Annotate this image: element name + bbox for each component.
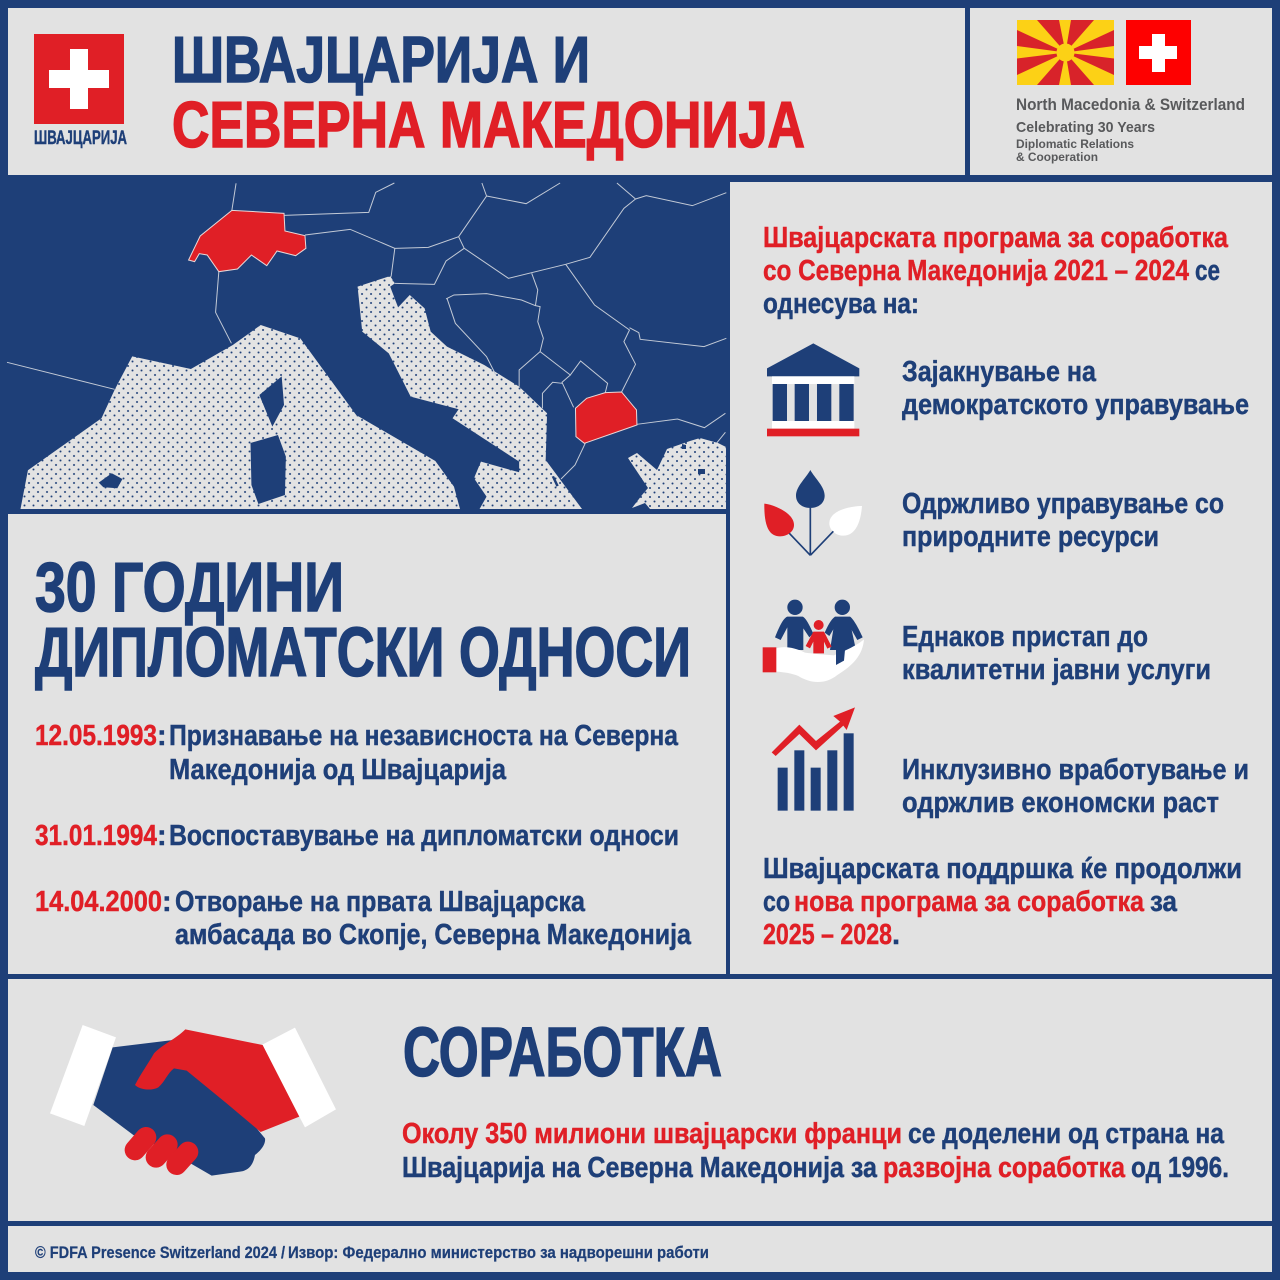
- panel: footer: [8, 1226, 1272, 1272]
- funding text: развојна соработка: [883, 1152, 1126, 1184]
- timeline: 1994: 31.01.1994: [35, 820, 157, 852]
- text: equal access: квалитетни јавни услуги: [902, 654, 1211, 686]
- icon: institution building: [767, 343, 859, 436]
- closing statement: за: [1150, 886, 1178, 918]
- logo text: & Cooperation: [1016, 150, 1098, 164]
- map: [7, 183, 726, 509]
- funding text: [402, 1118, 1229, 1184]
- programme intro: се: [1195, 255, 1220, 287]
- sea: western Mediterranean: [20, 325, 460, 509]
- programme intro: [763, 222, 1229, 320]
- funding text: од 1996.: [1131, 1152, 1229, 1184]
- logo text: North Macedonia & Switzerland: [1016, 95, 1245, 114]
- text: natural resources: Одржливо управување со: [902, 488, 1224, 520]
- text: employment and growth: одржлив економски раст: [902, 787, 1219, 819]
- panel: header title: [8, 8, 965, 175]
- heading: [35, 548, 691, 691]
- title: СЕВЕРНА МАКЕДОНИЈА: [172, 88, 805, 161]
- timeline: 2000: [35, 886, 692, 951]
- logo text: Diplomatic Relations: [1016, 137, 1134, 151]
- icon: North Macedonia flag: [1017, 20, 1114, 85]
- panel: 30 years of diplomatic relations: [8, 514, 726, 974]
- closing statement: 2025 – 2028: [763, 919, 892, 951]
- timeline: 2000: Отворање на првата Швајцарска: [175, 886, 586, 918]
- funding text: Швајцарија на Северна Македонија за: [402, 1152, 878, 1184]
- panel: cooperation programme: [730, 182, 1272, 974]
- timeline: 2000: :: [162, 886, 172, 918]
- Switzerland: [189, 210, 306, 272]
- text: equal access: Еднаков пристап до: [902, 621, 1148, 653]
- funding text: Околу 350 милиони швајцарски франци: [402, 1118, 902, 1150]
- heading: ДИПЛОМАТСКИ ОДНОСИ: [35, 613, 691, 691]
- source line: © FDFA Presence Switzerland 2024 /: [35, 1243, 285, 1262]
- closing statement: [763, 853, 1242, 951]
- programme intro: однесува на:: [763, 288, 919, 320]
- timeline: 1993: Македонија од Швајцарија: [169, 754, 507, 786]
- timeline: 2000: амбасада во Скопје, Северна Македонија: [175, 919, 692, 951]
- icon: Swiss logo: [34, 34, 127, 149]
- text: natural resources: природните ресурси: [902, 521, 1159, 553]
- text: natural resources: [902, 488, 1224, 553]
- sea: Aegean: [628, 438, 726, 509]
- panel: cooperation: [8, 979, 1272, 1221]
- North Macedonia: [575, 392, 637, 443]
- closing statement: нова програма за соработка: [794, 886, 1145, 918]
- text: democratic governance: Зајакнување на: [902, 356, 1097, 388]
- timeline: 1994: :: [157, 820, 167, 852]
- logo text: Celebrating 30 Years: [1016, 119, 1155, 136]
- icon: Swiss logo: ШВАЈЦАРИЈА: [34, 128, 127, 149]
- text: democratic governance: [902, 356, 1249, 421]
- icon: handshake: [50, 1025, 336, 1176]
- closing statement: .: [892, 919, 900, 951]
- source line: Извор: Федерално министерство за надворешни работи: [288, 1243, 709, 1262]
- timeline: 1993: Признавање на независноста на Северна: [169, 720, 679, 752]
- logo text: [1016, 95, 1245, 164]
- timeline: 2000: 14.04.2000: [35, 886, 162, 918]
- heading: 30 ГОДИНИ: [35, 548, 344, 626]
- closing statement: со: [763, 886, 790, 918]
- icon: natural resources: [764, 470, 862, 555]
- timeline: 1993: 12.05.1993: [35, 720, 157, 752]
- heading: СОРАБОТКА: [403, 1013, 722, 1091]
- timeline: 1993: :: [157, 720, 167, 752]
- icon: family in hand: [763, 600, 864, 682]
- funding text: се доделени од страна на: [908, 1118, 1225, 1150]
- icon: Swiss flag: [1126, 20, 1191, 85]
- timeline: 1994: [35, 820, 679, 852]
- title: ШВАЈЦАРИЈА И: [172, 23, 590, 96]
- programme intro: со Северна Македонија 2021 – 2024: [763, 255, 1189, 287]
- icon: growth chart: [772, 707, 855, 811]
- text: employment and growth: [902, 754, 1249, 819]
- country borders: [7, 183, 726, 479]
- source line: [35, 1243, 709, 1262]
- sea: Adriatic: [358, 276, 582, 509]
- timeline: 1993: [35, 720, 679, 786]
- title: [172, 23, 805, 161]
- timeline: 1994: Воспоставување на дипломатски односи: [169, 820, 679, 852]
- text: equal access: [902, 621, 1211, 686]
- panel: anniversary logo: [970, 8, 1272, 175]
